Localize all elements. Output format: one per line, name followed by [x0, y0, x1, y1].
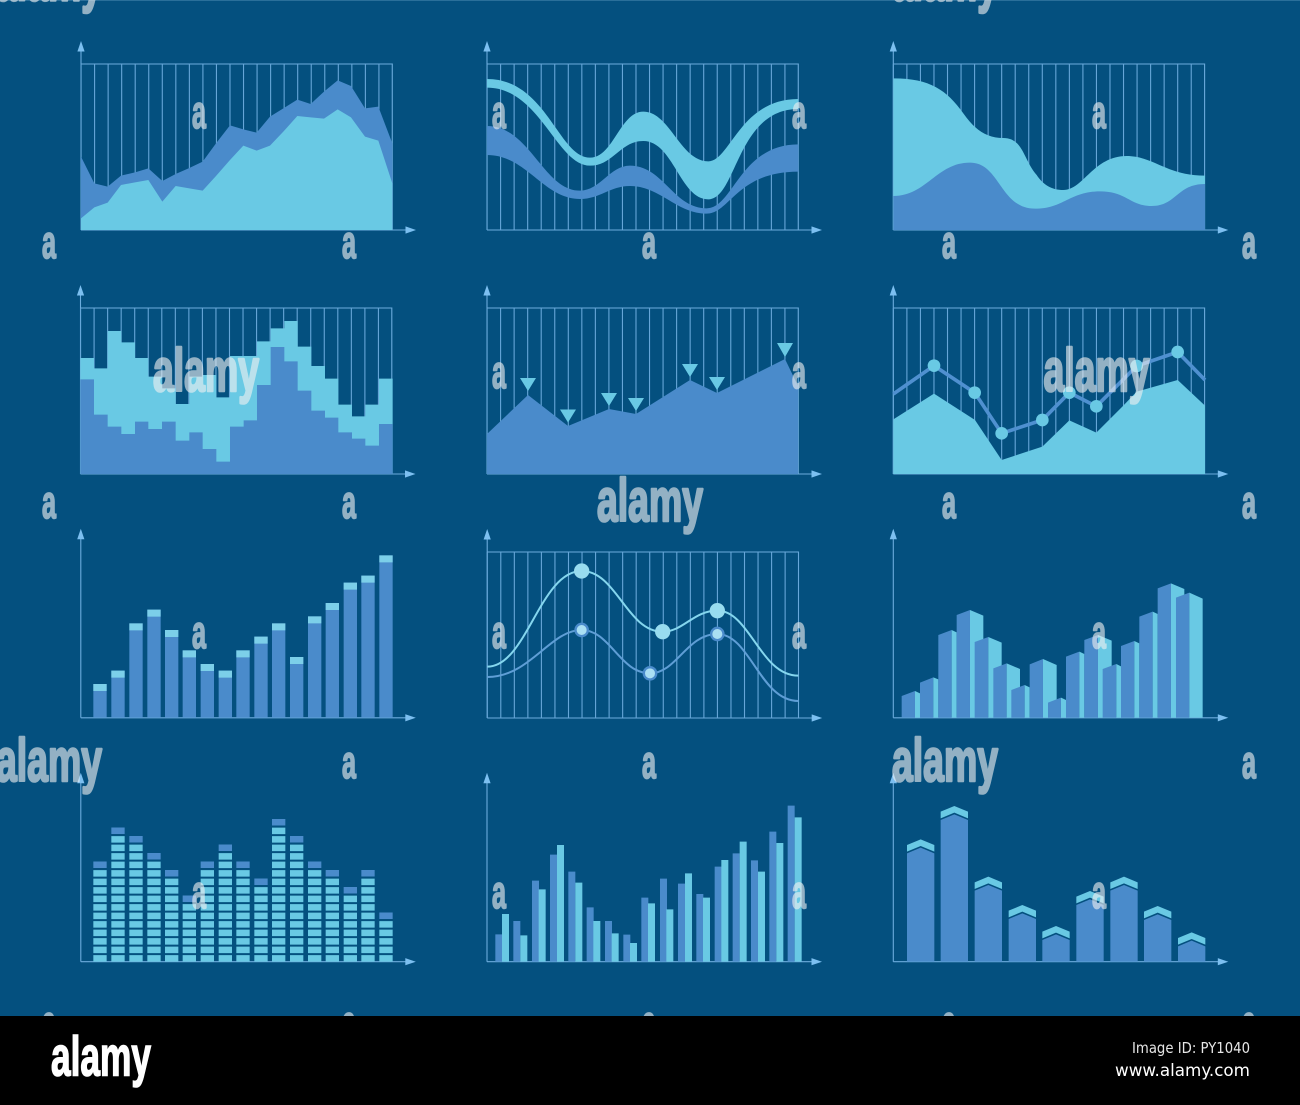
area: back blue	[81, 80, 392, 230]
line: blue	[893, 352, 1205, 433]
markers: dark curve	[574, 623, 725, 681]
watermarks: a	[492, 346, 506, 398]
curve: light	[487, 571, 798, 676]
watermarks: a	[192, 86, 206, 138]
steps: blue	[80, 347, 393, 474]
watermarks: a	[1242, 216, 1256, 268]
watermarks: a	[792, 606, 806, 658]
bars: blue	[93, 555, 393, 718]
footer bar	[0, 1016, 1300, 1105]
watermarks: a	[42, 216, 56, 268]
footer logo: alamy	[51, 1024, 151, 1088]
area: light	[893, 380, 1205, 474]
chart 3: smooth stacked area	[890, 41, 1228, 234]
watermarks: a	[1092, 606, 1106, 658]
watermarks: a	[342, 736, 356, 788]
watermarks: a	[42, 476, 56, 528]
chart 4: stepped stacked area	[77, 285, 416, 478]
watermarks: a	[792, 866, 806, 918]
chart 8: two curves with markers	[484, 529, 822, 722]
watermarks: a	[792, 346, 806, 398]
watermarks: a	[642, 996, 656, 1048]
bars: blue	[907, 814, 1205, 962]
watermarks: a	[642, 736, 656, 788]
area: blue	[487, 359, 798, 474]
markers: light curve	[574, 563, 725, 639]
area: front light	[81, 109, 392, 230]
watermarks: a	[1242, 996, 1256, 1048]
watermarks: a	[192, 866, 206, 918]
watermarks: a	[1242, 736, 1256, 788]
watermarks: a	[1242, 476, 1256, 528]
chart 12: chevron-topped bars	[890, 773, 1228, 965]
watermarks: a	[492, 606, 506, 658]
watermarks: alamy	[1044, 337, 1150, 404]
triangle markers	[520, 343, 793, 422]
column caps: blue	[93, 819, 393, 919]
segmented columns: light	[100, 827, 386, 962]
website: www.alamy.com	[1115, 1061, 1250, 1081]
ribbon: blue	[487, 126, 798, 214]
watermarks: alamy	[0, 727, 102, 794]
chart 1: jagged stacked area	[77, 41, 416, 234]
chart 7: capped bar chart	[77, 529, 416, 721]
watermarks: a	[342, 476, 356, 528]
watermarks: a	[942, 996, 956, 1048]
watermarks: a	[492, 86, 506, 138]
watermarks: a	[792, 86, 806, 138]
watermarks: alamy	[153, 337, 259, 404]
chart 10: segmented equalizer bars	[77, 773, 416, 965]
image id: Image ID: PY1040	[1132, 1039, 1250, 1057]
bars: light	[502, 817, 802, 962]
watermarks: a	[642, 216, 656, 268]
watermarks: alamy	[892, 727, 998, 794]
area: light	[893, 78, 1205, 230]
steps: light	[80, 321, 393, 474]
area: blue	[893, 163, 1205, 230]
watermarks: a	[1092, 86, 1106, 138]
watermarks: a	[42, 996, 56, 1048]
bar caps: light	[93, 555, 393, 691]
watermarks: a	[342, 216, 356, 268]
chart 5: area with triangle markers	[483, 285, 822, 478]
watermarks: a	[342, 996, 356, 1048]
chart 9: 3D building bars	[890, 529, 1228, 721]
watermarks: a	[942, 216, 956, 268]
chart 6: area with line and markers	[890, 285, 1228, 478]
watermarks: a	[492, 866, 506, 918]
watermarks: alamy	[597, 467, 703, 534]
watermarks: a	[192, 606, 206, 658]
curve: dark	[487, 630, 798, 701]
watermarks: a	[942, 476, 956, 528]
ribbon: light	[487, 79, 798, 199]
chart 11: paired bars	[483, 773, 822, 965]
chart 2: flowing ribbons	[483, 41, 822, 234]
watermarks: a	[1092, 866, 1106, 918]
bars: blue	[495, 806, 795, 962]
chevrons: light	[907, 806, 1205, 945]
markers	[928, 346, 1184, 440]
